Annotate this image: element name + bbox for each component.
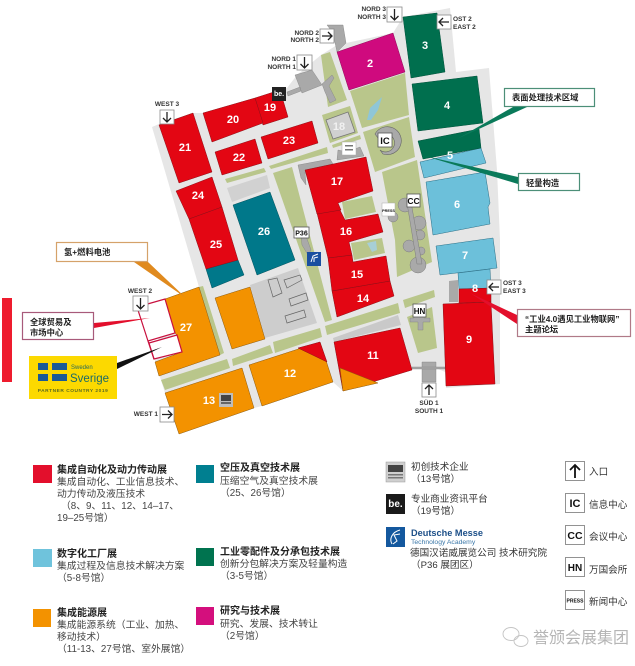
key: CC: 会议中心 [589, 531, 628, 543]
entry: NORD 2: NORTH 2 [290, 37, 319, 44]
callout: lightweight [425, 156, 580, 190]
legend [33, 461, 628, 655]
hall 25 [189, 207, 244, 288]
IC building [375, 127, 401, 155]
legend: digital factory: （5-8号馆） [57, 571, 110, 584]
callout: global trade: 全球贸易及 [30, 317, 72, 327]
hall 6 [426, 172, 490, 235]
label: CC: CC [407, 196, 420, 206]
label: PRESS: PRESS [382, 209, 395, 213]
legend: be. [386, 493, 488, 517]
entry: OST 3: EAST 3 [503, 288, 526, 295]
legend: subcontracting: 工业零配件及分承包技术展 [220, 545, 340, 558]
legend: subcontracting: 创新分包解决方案及轻量构造 [220, 557, 348, 570]
hall 7 [436, 238, 497, 275]
legend: Deutsche Messe: 德国汉诺威展览公司 技术研究院 [410, 547, 547, 559]
exhibition grounds block [250, 268, 317, 338]
label: P36 [294, 227, 309, 238]
legend: Deutsche Messe [386, 527, 547, 571]
legend: subcontracting: （3-5号馆） [220, 569, 273, 582]
entry: NORD 1: NORD 1 [271, 56, 296, 63]
hall 26 [233, 192, 295, 275]
label: P36: P36 [295, 230, 308, 238]
callout: industry 4.0: 主题论坛 [525, 324, 559, 334]
red side bar [2, 298, 12, 382]
callout: hydrogen [56, 242, 186, 298]
key: IC [566, 494, 628, 512]
entry: OST 2 [437, 15, 476, 31]
hall 25: 25 [210, 239, 222, 251]
hall 17 [305, 157, 373, 214]
key: IC: 信息中心 [589, 499, 628, 511]
key: HN: HN [568, 563, 582, 574]
entry: NORD 3: NORTH 3 [357, 14, 386, 21]
key: HN [566, 558, 628, 576]
legend: be.: 专业商业资讯平台 [411, 493, 488, 505]
hall 16 [317, 210, 383, 258]
hall 8: 8 [472, 283, 478, 295]
hall 22 [215, 139, 262, 175]
entry: SUD 1: SÜD 1 [419, 398, 439, 407]
hall 9: 9 [466, 334, 472, 346]
hall 4: 4 [444, 100, 451, 112]
legend: be.: （19号馆） [411, 505, 460, 517]
entry: WEST 1: WEST 1 [134, 411, 158, 418]
entry: WEST 2: WEST 2 [128, 288, 152, 295]
hall 5 [418, 129, 486, 178]
key: PRESS [566, 590, 628, 610]
legend: energy [33, 606, 190, 655]
hall 12: 12 [284, 368, 296, 380]
key: entrance: 入口 [589, 467, 608, 478]
icon: be. [272, 87, 286, 101]
watermark: 誉颁会展集团 [533, 629, 629, 647]
hall 11 [334, 328, 412, 391]
entry: NORD 3: NORD 3 [361, 6, 386, 13]
hall 14 [332, 281, 394, 317]
watermark [503, 628, 629, 647]
entry: WEST 3: WEST 3 [155, 101, 179, 108]
legend: research: 研究与技术展 [220, 604, 280, 617]
hall 3 [403, 13, 445, 78]
key: CC: CC [567, 530, 583, 542]
legend: be.: be. [388, 499, 403, 510]
hall 11: 11 [367, 350, 379, 362]
hall 26: 26 [258, 226, 270, 238]
green areas [161, 52, 437, 390]
entry: OST 2: EAST 2 [453, 24, 476, 31]
entry: SUD 1: SOUTH 1 [415, 408, 443, 415]
hall 27: 27 [180, 322, 192, 334]
legend: energy: 集成能源展 [57, 606, 107, 619]
hall 4 [412, 76, 483, 131]
legend: automation: 19–25号馆） [57, 511, 114, 524]
legend: start-ups [386, 461, 469, 485]
hall 24 [176, 177, 222, 219]
hall 15 [328, 255, 390, 291]
legend: automation: 集成自动化及动力传动展 [57, 463, 167, 476]
entry: WEST 1 [134, 407, 174, 422]
hall 6: 6 [454, 199, 460, 211]
entry: NORD 2 [290, 29, 334, 44]
hall 22: 22 [233, 152, 245, 164]
callout: hydrogen: 氢+燃料电池 [64, 247, 111, 257]
entry: WEST 2 [128, 288, 152, 311]
hall 20 [203, 98, 263, 142]
legend: compressed air: 空压及真空技术展 [220, 461, 300, 474]
legend: automation: 集成自动化、工业信息技术、 [57, 475, 184, 488]
entry: OST 2: OST 2 [453, 16, 472, 23]
callout: partner country: PARTNER COUNTRY 2019 [38, 388, 108, 394]
hall 23: 23 [283, 135, 295, 147]
key: entrance [566, 462, 608, 480]
legend: research [196, 604, 318, 642]
callout: partner country: Sweden [71, 365, 93, 371]
legend: automation: 动力传动及液压技术 [57, 487, 145, 500]
entry: NORD 1: NORTH 1 [267, 64, 296, 71]
grey buildings [227, 25, 458, 382]
legend: compressed air: 压缩空气及真空技术展 [220, 474, 318, 487]
legend: Deutsche Messe: （P36 展团区） [411, 559, 479, 571]
callout: lightweight: 轻量构造 [526, 178, 560, 188]
hall 13 [165, 368, 254, 434]
icon: start-up [219, 393, 233, 407]
CC complex [388, 198, 426, 273]
global trade boxes [137, 299, 182, 359]
hall 2: 2 [367, 58, 373, 70]
key: HN: 万国会所 [589, 564, 628, 576]
IC building: IC [380, 136, 390, 147]
entry: NORD 1 [267, 55, 312, 71]
hall 21: 21 [179, 142, 191, 154]
callout: surface technology [457, 88, 594, 139]
hall 14: 14 [357, 293, 370, 305]
hall 24: 24 [192, 190, 205, 202]
label: PRESS [382, 203, 395, 216]
label: HN [413, 304, 426, 317]
legend: digital factory [33, 547, 185, 584]
hall 8 [458, 269, 491, 303]
icon: P36 academy [307, 252, 321, 266]
key: PRESS: 新闻中心 [589, 596, 628, 608]
legend: research: 研究、发展、技术转让 [220, 617, 318, 630]
hall 18: 18 [333, 121, 345, 133]
legend: Deutsche Messe: Deutsche Messe [411, 528, 483, 538]
legend: research: （2号馆） [220, 629, 265, 642]
legend: energy: 移动技术） [57, 630, 106, 643]
hall 20: 20 [227, 114, 239, 126]
legend: energy: 集成能源系统（工业、加热、 [57, 618, 184, 631]
hall 23 [261, 121, 318, 159]
callout: surface technology: 表面处理技术区域 [512, 92, 579, 102]
hall 27 [155, 287, 220, 376]
hall 21 [159, 113, 212, 183]
legend: energy: （11-13、27号馆、室外展馆） [57, 642, 190, 655]
site ground [152, 8, 500, 408]
hall 19: 19 [264, 102, 276, 114]
hall 7: 7 [462, 250, 468, 262]
label: hall 18 sign [342, 142, 356, 155]
hall 15: 15 [351, 269, 363, 281]
legend: compressed air: （25、26号馆） [220, 486, 291, 499]
key: PRESS: PRESS [567, 598, 584, 604]
callout: industry 4.0: “工业4.0遇见工业物联网” [525, 314, 620, 324]
label: HN: HN [414, 307, 425, 316]
callout: partner country [29, 347, 162, 399]
hall 17: 17 [331, 176, 343, 188]
callout: global trade: 市场中心 [30, 328, 64, 338]
key: CC [566, 526, 628, 544]
entry: NORD 2: NORD 2 [294, 30, 319, 37]
legend: automation [33, 463, 184, 524]
legend: start-ups: （13号馆） [411, 473, 460, 485]
legend: digital factory: 集成过程及信息技术解决方案 [57, 559, 185, 572]
site map [128, 6, 526, 434]
hall 13: 13 [203, 395, 215, 407]
hall 5: 5 [447, 150, 453, 162]
legend: Deutsche Messe: Technology Academy [411, 539, 476, 546]
hall 12 [249, 342, 333, 406]
entry: SUD 1 [415, 383, 443, 415]
hall 9 [443, 302, 495, 386]
legend: automation: （8、9、11、12、14–17、 [61, 500, 179, 512]
legend: compressed air [196, 461, 318, 499]
key: IC: IC [570, 498, 581, 510]
callout: industry 4.0 [470, 293, 630, 336]
callout: global trade [22, 312, 150, 340]
callout: partner country: Sverige [70, 373, 109, 385]
hall 16: 16 [340, 226, 352, 238]
entry: OST 3 [487, 280, 526, 295]
hall 19 [255, 90, 288, 125]
entry: WEST 3 [155, 101, 179, 124]
legend: start-ups: 初创技术企业 [411, 461, 469, 473]
legend: digital factory: 数字化工厂展 [57, 547, 117, 560]
legend: subcontracting [196, 545, 348, 582]
entry: NORD 3 [357, 6, 402, 22]
outdoor hall [215, 287, 265, 349]
icon: be.: be. [274, 91, 284, 98]
hall 2 [337, 33, 405, 90]
hall 3: 3 [422, 40, 428, 52]
entry: OST 3: OST 3 [503, 280, 522, 287]
